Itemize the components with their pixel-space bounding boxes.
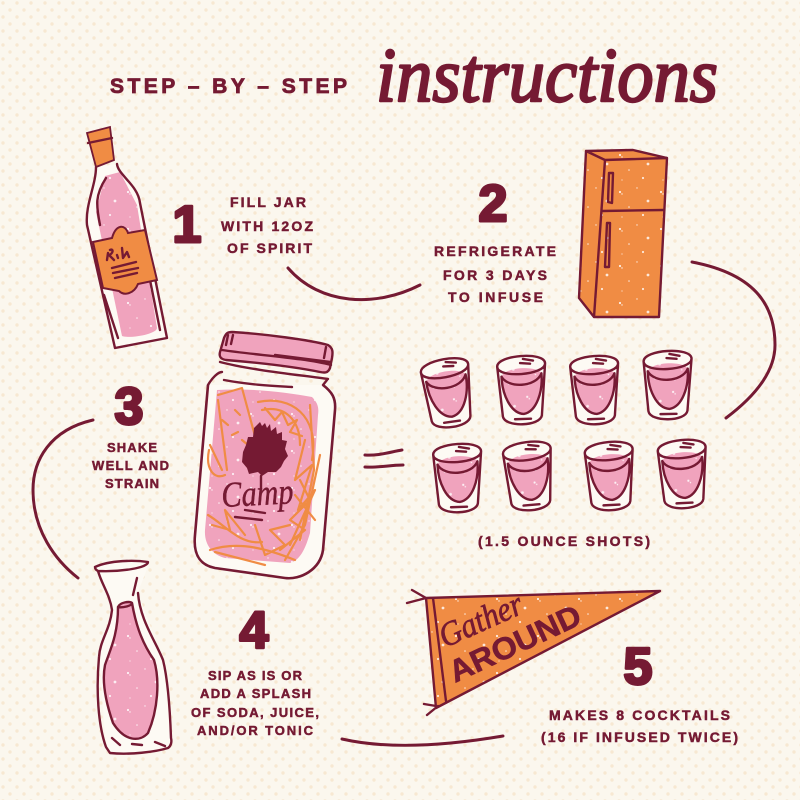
step 4 text: SIP AS IS OR	[208, 668, 303, 683]
step 3 text: STRAIN	[105, 476, 159, 491]
jar logo: Camp tree: Camp	[220, 471, 294, 515]
icon: refrigerator	[579, 150, 667, 317]
arrow: step 4 to step 5	[342, 736, 503, 745]
jar contents: orange peel scribbles	[208, 388, 320, 565]
shot glass 7	[584, 441, 636, 511]
step 4 text: ADD A SPLASH	[200, 686, 311, 701]
step 4 text: AND/OR TONIC	[197, 723, 314, 738]
shots caption: (1.5 OUNCE SHOTS)	[478, 533, 650, 549]
step 3 text: SHAKE	[107, 440, 157, 455]
step 5 text: MAKES 8 COCKTAILS	[549, 707, 730, 723]
step 1 number: 1	[173, 196, 201, 254]
step 1 text: WITH 12OZ	[221, 218, 313, 234]
step 1 text: OF SPIRIT	[227, 240, 312, 256]
shot glass 2	[497, 355, 547, 425]
pennant text: Gather: Gather	[433, 585, 529, 655]
step 4 number: 4	[240, 602, 269, 660]
jar logo: Camp tree	[220, 422, 294, 520]
step 5 text: (16 IF INFUSED TWICE)	[541, 729, 738, 745]
step 2 text: FOR 3 DAYS	[443, 267, 547, 283]
step 4 text: OF SODA, JUICE,	[191, 705, 319, 720]
icon: carafe	[95, 561, 171, 754]
step 2 number: 2	[479, 175, 507, 233]
equals sign	[365, 450, 403, 467]
jar lid	[220, 332, 333, 373]
bottle cap	[87, 127, 114, 167]
shot glass 3	[570, 355, 620, 425]
arrow: step 1 to step 2	[288, 268, 420, 300]
arrow: step 2 to shots	[692, 262, 775, 418]
step 3 number: 3	[115, 378, 143, 436]
step 2 text: TO INFUSE	[448, 289, 543, 305]
step 3 text: WELL AND	[92, 458, 169, 473]
pennant text: AROUND: AROUND	[443, 598, 587, 689]
heading: instructions: instructions	[376, 32, 718, 118]
arrow: step 3 to carafe	[33, 420, 93, 578]
shot glass 8	[657, 439, 709, 509]
shot glass 5	[433, 443, 483, 513]
heading: step by step: STEP – BY – STEP	[110, 75, 347, 98]
shot glasses	[419, 351, 709, 513]
step 2 text: REFRIGERATE	[434, 243, 556, 259]
icon: mason jar	[195, 332, 335, 578]
shot glass 6	[502, 440, 556, 512]
shot glass 4	[643, 351, 693, 420]
step 1 text: FILL JAR	[230, 194, 306, 210]
step 5 number: 5	[624, 638, 652, 696]
shot glass 1	[419, 356, 477, 430]
icon: pennant	[407, 585, 660, 715]
bottle label	[93, 227, 157, 294]
icon: liquor bottle	[87, 127, 167, 348]
